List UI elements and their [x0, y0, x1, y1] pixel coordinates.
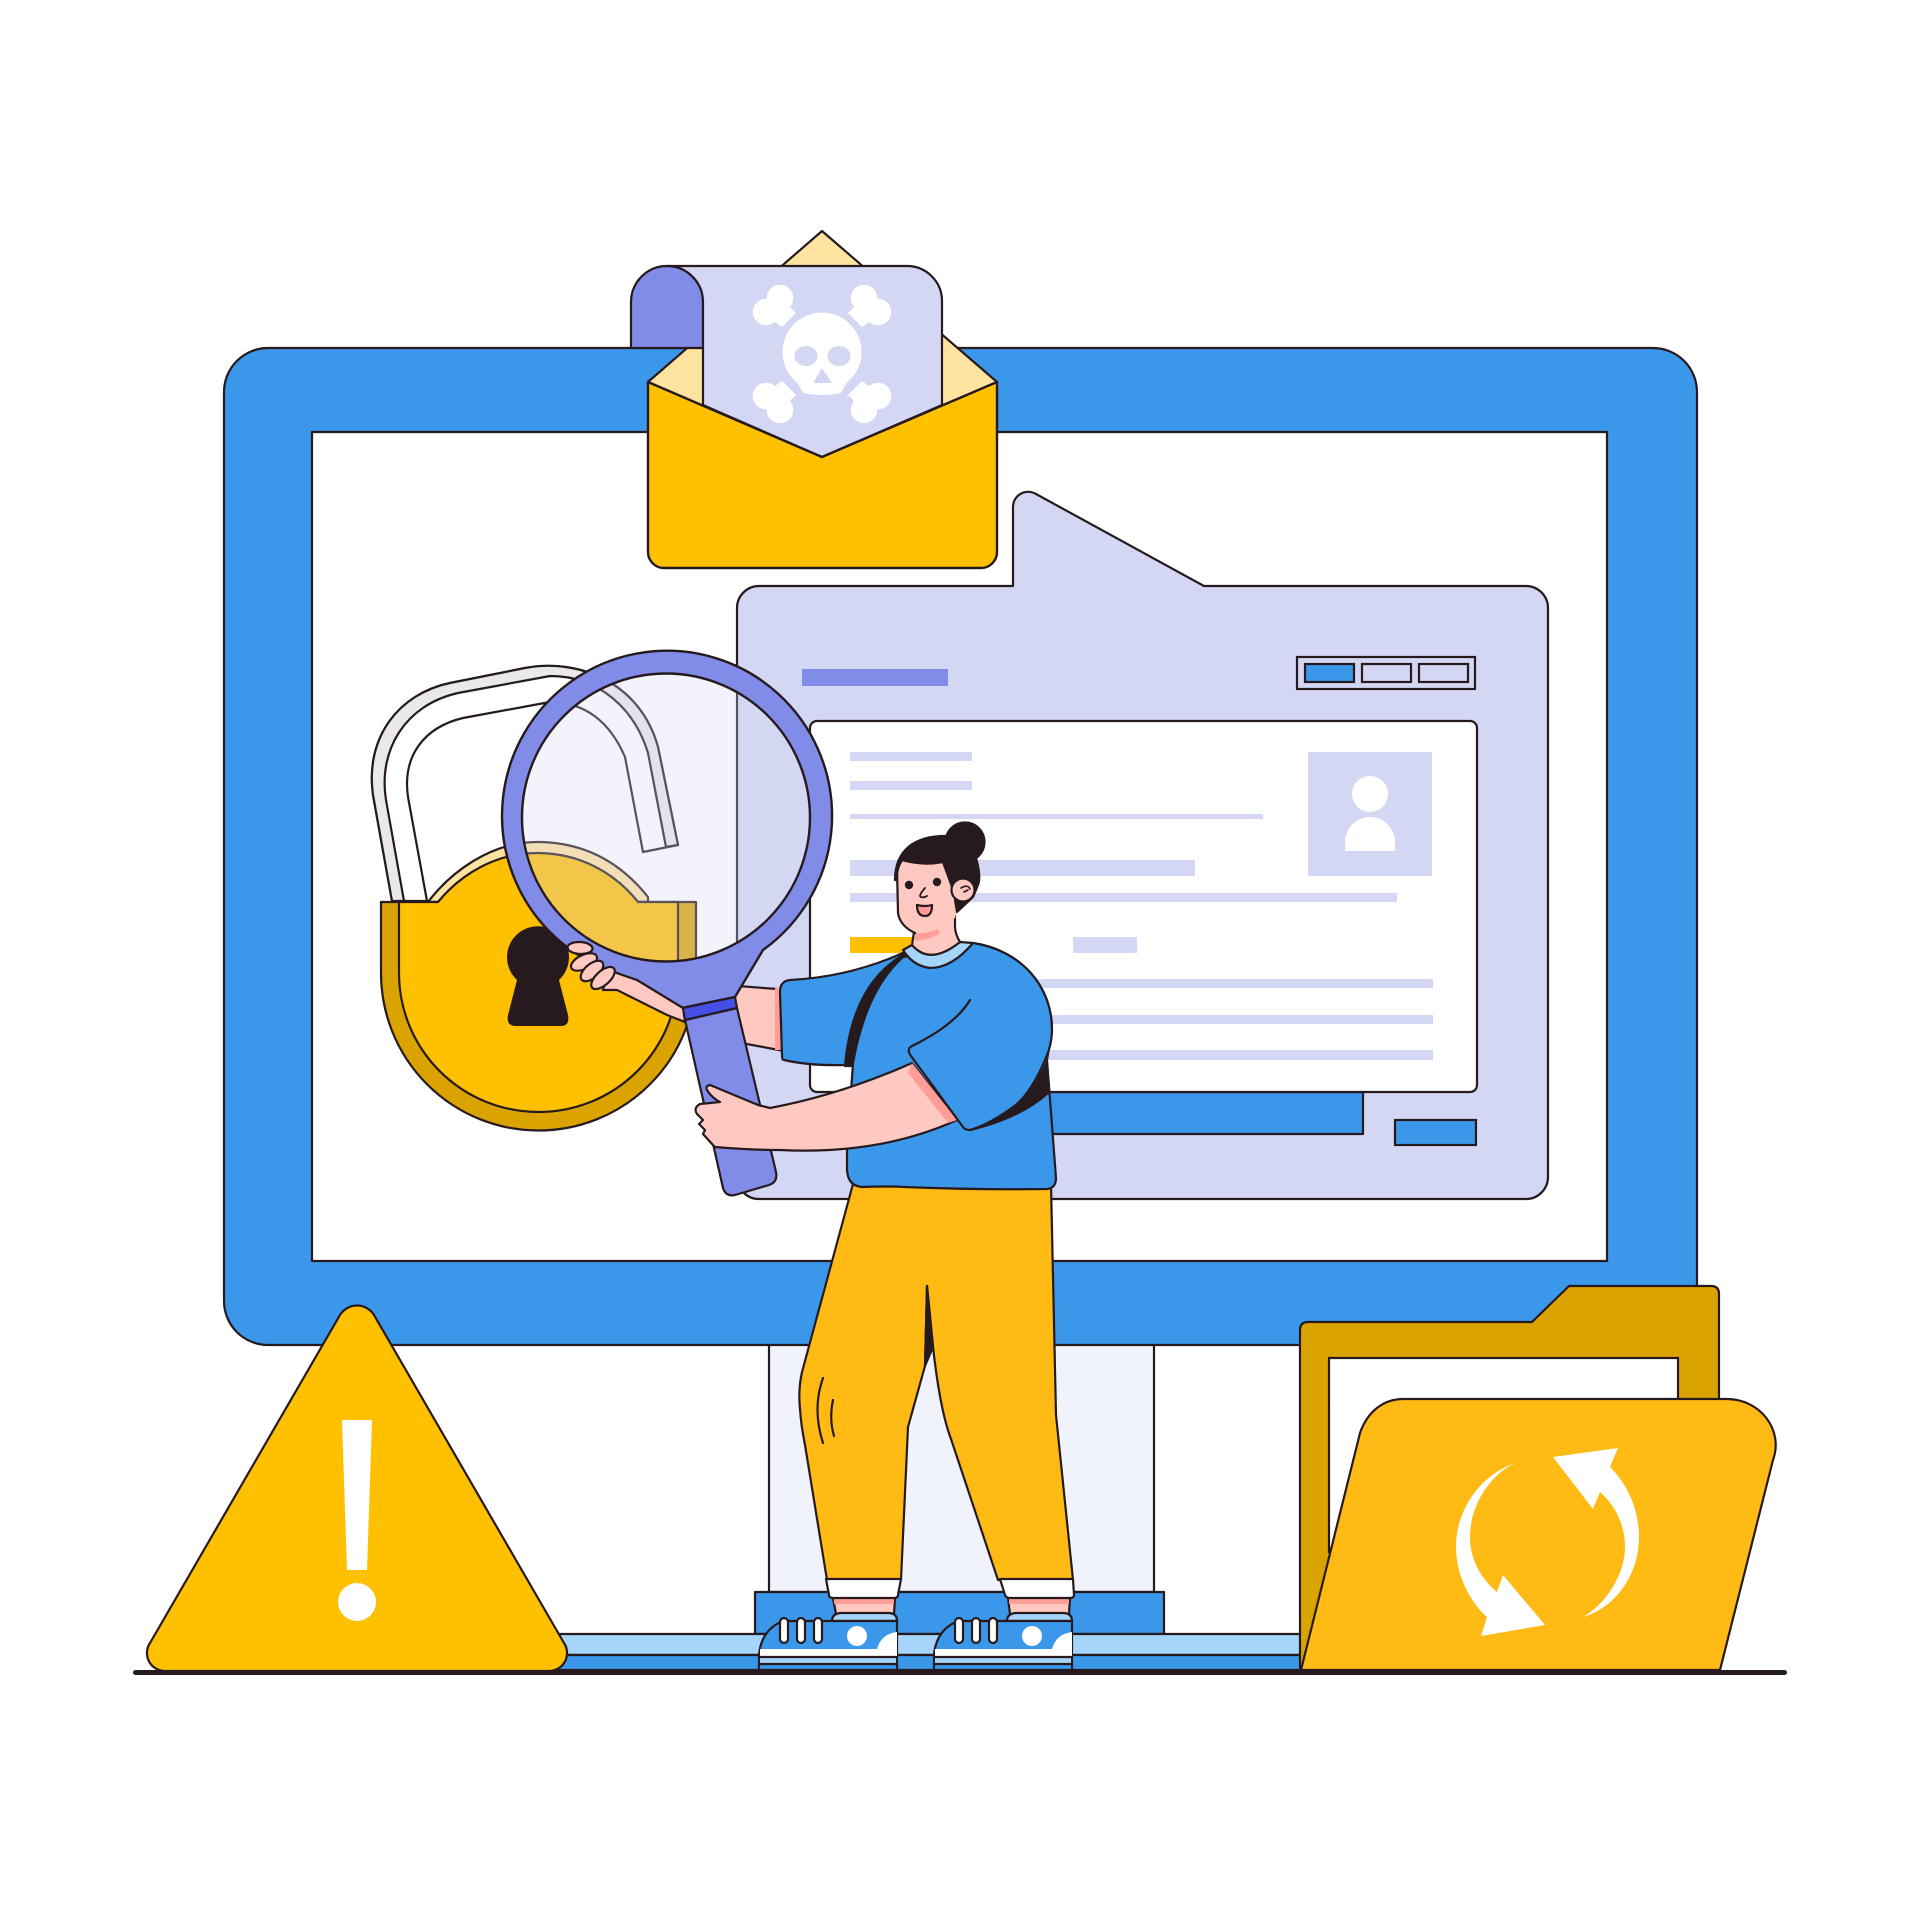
window title bar [802, 669, 948, 686]
icon: sync arrows [1456, 1448, 1639, 1636]
browser window panel with tab [737, 492, 1548, 1199]
arm shadow [908, 1063, 957, 1123]
warning triangle [147, 1306, 567, 1671]
face [897, 855, 965, 933]
ear [952, 878, 974, 902]
back arm [725, 985, 790, 1052]
knee creases [818, 1378, 834, 1443]
padlock shackle [372, 666, 678, 901]
magnifier lens glass [522, 674, 810, 962]
neck shadow [915, 929, 939, 941]
padlock body [428, 842, 648, 902]
magnifier handle [685, 1008, 776, 1195]
icon: skull and crossbones [753, 285, 891, 423]
left shoe [759, 1613, 897, 1670]
person [696, 822, 1074, 1670]
front sleeve [909, 943, 1052, 1130]
right sock and cuff [1008, 1598, 1070, 1614]
envelope with malware letter [631, 231, 997, 568]
folder front [1301, 1399, 1776, 1670]
left sock and cuff [833, 1598, 895, 1614]
shirt collar [903, 942, 973, 968]
folder back [1300, 1286, 1719, 1672]
small blue button [1395, 1120, 1476, 1145]
neck [912, 900, 960, 955]
neck outline [912, 906, 960, 945]
document text lines [850, 752, 1433, 1060]
pants [799, 1184, 1073, 1580]
padlock [372, 666, 696, 1130]
letter roll [631, 266, 703, 348]
ground line [133, 1670, 1787, 1675]
hand on lens [567, 941, 685, 1022]
right shoe [934, 1613, 1072, 1670]
window buttons [1297, 657, 1475, 689]
face outline [897, 868, 915, 933]
envelope back flap [648, 231, 997, 457]
mouth [917, 905, 932, 916]
blue submit bar [1000, 1092, 1363, 1134]
yellow highlight line [850, 937, 920, 953]
front arm and hand [696, 1063, 957, 1151]
keyhole [507, 926, 569, 1026]
torso shadow [845, 955, 903, 1066]
magnifier collar [682, 997, 737, 1020]
exclamation mark [338, 1420, 376, 1621]
back sleeve [780, 952, 905, 1065]
folder [1300, 1286, 1776, 1672]
magnifier ring and neck [502, 651, 832, 1008]
monitor stand and base [540, 1340, 1305, 1670]
profile photo [1308, 752, 1432, 876]
torso and shirt [847, 943, 1056, 1189]
folder paper [1329, 1358, 1678, 1553]
underarm shadow [970, 1060, 1048, 1130]
monitor [224, 348, 1697, 1345]
document card [810, 721, 1477, 1092]
envelope front [648, 382, 997, 568]
eyes and nose [905, 881, 913, 889]
hair back and bun [895, 836, 979, 912]
letter sheet [667, 266, 942, 457]
magnifying glass [502, 651, 832, 1195]
